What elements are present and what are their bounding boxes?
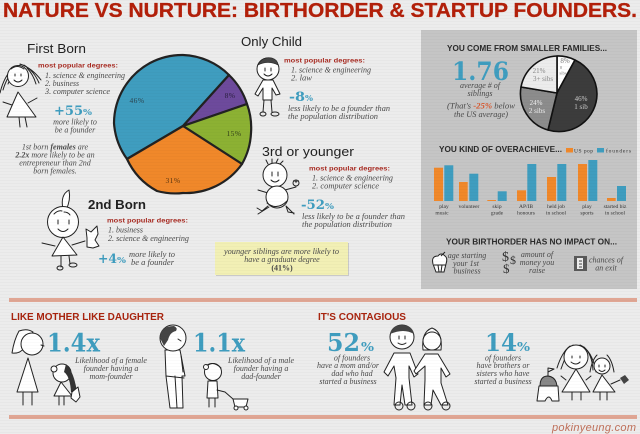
degrees list: 3. computer science — [44, 87, 110, 96]
icon: dollar signs — [502, 250, 516, 276]
degrees list: 1. science & engineering — [45, 71, 125, 80]
siblings pie chart: 3+ sibs — [533, 75, 553, 83]
degrees label: most popular degrees: — [309, 166, 390, 172]
text: amount of money — [520, 250, 555, 275]
stat caption: mom founder: Likelihood of a female — [74, 356, 147, 365]
icon: couple holding hands — [384, 325, 450, 410]
degrees label: most popular degrees: — [107, 218, 188, 224]
callout: younger siblings — [215, 242, 349, 276]
stat: -8%: -8 — [289, 90, 305, 105]
legend: founders — [606, 148, 631, 154]
heading: 2nd born: 2nd Born — [88, 197, 146, 212]
heading: smaller families: YOU COME FROM SMALLER FAMILIES... — [447, 43, 607, 53]
stat: +4%: % — [117, 255, 126, 265]
source credit: pokinyeung.com — [551, 422, 636, 434]
text: chances of exit: an exit — [595, 264, 618, 272]
stat caption: the population distribution — [302, 220, 392, 229]
stat caption: be a founder — [55, 126, 96, 134]
text: age starting: business — [453, 266, 481, 276]
degrees label: most popular degrees: — [38, 62, 118, 70]
stat caption: parents — [317, 354, 380, 386]
bar chart: in school — [546, 210, 566, 216]
stat caption: mom founder: mom-founder — [89, 372, 133, 381]
text: age starting: your 1st — [452, 259, 480, 268]
icon: sisters and sandcastle — [537, 345, 629, 401]
bar chart: sports — [580, 210, 594, 216]
bar chart: grade — [491, 210, 504, 216]
text: amount of money: money you — [520, 258, 554, 267]
panel: second born — [42, 190, 189, 270]
degrees list: 2. business — [45, 79, 79, 88]
bar chart — [434, 160, 627, 216]
heading: overachieve: YOU KIND OF OVERACHIEVE... — [439, 144, 562, 154]
text: age starting: age starting — [448, 251, 486, 260]
stat: -8%: % — [305, 93, 313, 103]
stat caption: parents: dad who had — [331, 369, 374, 378]
bar chart: honours — [517, 210, 535, 216]
degrees list: 1. science & engineering — [291, 66, 371, 74]
title: NATURE VS NURTURE: BIRTHORDER & STARTUP FOUNDERS. — [3, 0, 637, 22]
stat caption: siblings: started a business — [474, 377, 532, 386]
degrees list — [44, 71, 125, 96]
text: chances of exit — [589, 256, 625, 272]
panel: only child — [241, 34, 390, 121]
note: first born females: born females. — [33, 166, 77, 176]
stat: -52%: % — [325, 201, 334, 211]
text: chances of exit: chances of — [589, 256, 625, 264]
siblings pie chart — [520, 56, 597, 132]
icon: father and son with wagon — [160, 325, 248, 410]
section: like mother like daughter — [11, 311, 294, 410]
text: age starting — [448, 251, 486, 276]
note: below US average — [447, 102, 516, 119]
siblings pie chart: 24% — [530, 99, 543, 107]
degrees list: 2. law — [291, 74, 313, 82]
stat caption: siblings — [474, 354, 532, 386]
stat caption: dad founder: dad-founder — [241, 372, 282, 381]
stat caption — [302, 212, 405, 229]
main pie chart: 8% — [225, 91, 235, 100]
stat caption: parents: started a business — [319, 377, 377, 386]
siblings pie chart: 8% — [560, 57, 570, 65]
heading: no impact: YOUR BIRTHORDER HAS NO IMPACT ON... — [446, 236, 617, 246]
divider bottom — [9, 415, 637, 419]
siblings pie chart: 21% — [533, 67, 546, 75]
heading: IT'S CONTAGIOUS — [318, 311, 406, 323]
stat caption: siblings — [468, 89, 492, 98]
degrees list: 1. science & engineering — [312, 174, 393, 182]
stat: -8% — [289, 90, 313, 105]
degrees list: 2. science & engineering — [108, 234, 189, 243]
degrees list: 2. computer science — [312, 182, 379, 190]
stat caption: more likely to — [129, 250, 175, 259]
bar chart: volunteer — [459, 204, 480, 210]
legend — [566, 148, 631, 154]
stat caption: parents: have a mom and/or — [317, 361, 380, 370]
callout: younger siblings: younger siblings are more likely to — [223, 247, 339, 256]
icon: dollar signs: $ — [502, 250, 509, 265]
section: it's contagious — [317, 311, 629, 410]
icon: dollar signs: $ — [510, 253, 516, 267]
note: below US average: (That's -25% below — [447, 102, 516, 110]
stat caption: dad founder — [227, 356, 294, 381]
degrees list: 1. business — [108, 226, 143, 234]
stat caption: more likely to — [53, 118, 97, 126]
stat: 14%: % — [517, 340, 531, 354]
stat caption: siblings: sisters who have — [477, 369, 530, 378]
degrees list — [312, 174, 393, 190]
heading: 3rd or younger: 3rd or younger — [262, 144, 355, 159]
stat: +4%: +4 — [98, 252, 117, 267]
stat: 52%: 52 — [327, 328, 360, 357]
stat: +55%: +55 — [54, 104, 83, 119]
stat caption: siblings: have brothers or — [476, 361, 530, 370]
stat caption: dad founder: founder having a — [234, 364, 288, 373]
panel: third or younger — [257, 144, 405, 229]
panel: right sidebar — [421, 30, 637, 289]
stat caption: parents: of founders — [334, 354, 370, 362]
siblings pie chart: 0 — [560, 65, 563, 70]
stat caption: the population distribution — [288, 112, 378, 121]
panel: first born — [0, 41, 125, 176]
bar chart: play — [439, 204, 449, 210]
icon: dollar signs: $ — [503, 261, 510, 276]
siblings pie chart: 1 sib — [574, 103, 588, 111]
note: below US average: the US average) — [454, 110, 508, 119]
callout: younger siblings: (41%) — [271, 264, 293, 272]
text: amount of money: amount of — [521, 250, 555, 259]
icon: only child boy — [255, 58, 280, 116]
degrees list — [108, 226, 189, 243]
icon: cupcake — [433, 252, 447, 272]
stat caption — [460, 81, 502, 98]
note: first born females: 2.2x more likely to be an — [14, 150, 95, 160]
stat caption: be a founder — [131, 258, 175, 267]
icon: baby with flower — [257, 159, 299, 214]
stat caption — [288, 104, 390, 121]
stat: -52%: -52 — [301, 198, 325, 213]
degrees list — [291, 66, 371, 82]
bar chart: AP/IB — [519, 204, 533, 210]
note: first born females — [14, 142, 95, 176]
stat: 1.1x: 1.1x — [193, 328, 246, 358]
stat: 1.76 siblings: 1.76 — [452, 57, 509, 86]
note: first born females: 1st born females are — [22, 142, 89, 152]
icon: second born girl with teddy — [42, 190, 99, 270]
heading: first born: First Born — [27, 41, 86, 56]
stat caption: less likely to be a founder than — [302, 212, 405, 221]
divider top — [9, 298, 637, 302]
bar chart: music — [435, 210, 449, 216]
stat caption — [53, 118, 97, 134]
stat caption: average # of — [460, 81, 502, 90]
bar chart: held job — [547, 204, 565, 210]
stat caption: dad founder: Likelihood of a male — [227, 356, 294, 365]
bar chart: started biz — [604, 204, 627, 210]
stat: 52%: % — [361, 340, 375, 354]
main pie chart: 31% — [166, 176, 180, 185]
stat caption: mom founder: founder having a — [84, 364, 138, 373]
bar chart: play — [582, 204, 592, 210]
stat: 1.4x: 1.4x — [47, 328, 101, 358]
siblings pie chart: 46% — [575, 95, 588, 103]
icon: mother and daughter — [12, 330, 80, 405]
stat caption: mom founder — [74, 356, 147, 381]
main pie chart: 46% — [130, 96, 144, 105]
legend: US pop — [574, 148, 593, 154]
stat: 14%: 14 — [485, 328, 517, 357]
icon: exit door — [574, 256, 587, 271]
callout: younger siblings: have a graduate degree — [244, 255, 320, 264]
siblings pie chart: 2 sibs — [529, 107, 545, 115]
note: first born females: entrepreneur than 2nd — [19, 158, 92, 168]
stat caption: less likely to be a founder than — [288, 104, 390, 113]
main pie chart — [114, 55, 251, 193]
siblings pie chart: sibs — [559, 70, 567, 76]
icon: first born girl — [0, 64, 41, 127]
heading: LIKE MOTHER LIKE DAUGHTER — [11, 311, 164, 323]
bar chart: skip — [492, 204, 502, 210]
bar chart: in school — [605, 210, 625, 216]
main pie chart: 15% — [227, 129, 241, 138]
heading: only child: Only Child — [241, 34, 302, 49]
stat caption — [129, 250, 175, 267]
stat caption: siblings: of founders — [485, 354, 521, 362]
stat: +55%: % — [83, 107, 92, 117]
text: amount of money: raise — [529, 266, 545, 275]
degrees label: most popular degrees: — [284, 58, 365, 64]
